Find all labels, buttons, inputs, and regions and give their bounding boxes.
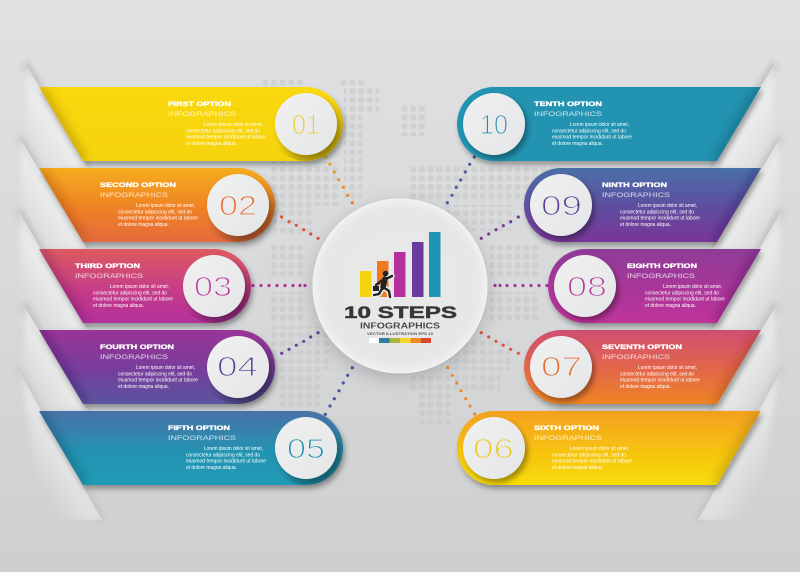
connector: dotted line 06: [446, 366, 476, 416]
background: dotted world map: [261, 78, 560, 424]
text block: Lorem ipsum dolor sit amet,: [638, 203, 697, 209]
text block: consectetur adipiscing elit, sed do: [645, 290, 719, 296]
subheading: INFOGRAPHICS: [534, 435, 603, 442]
text block: [620, 203, 700, 228]
subheading: INFOGRAPHICS: [602, 354, 671, 361]
number badge: [463, 417, 525, 479]
subheading: INFOGRAPHICS: INFOGRAPHICS: [360, 320, 440, 330]
subheading: INFOGRAPHICS: [534, 111, 603, 118]
panel: step 05: [39, 411, 343, 485]
text block: consectetur adipiscing elit, sed do: [620, 209, 694, 215]
text block: et dolore magna aliqua.: [620, 384, 671, 390]
heading: THIRD OPTION: [75, 263, 140, 270]
text block: eiusmod tempor incididunt ut labore: [118, 378, 198, 384]
bar chart icon: [360, 232, 440, 297]
text block: [645, 284, 725, 309]
panel: step 02: [39, 168, 275, 242]
text block: et dolore magna aliqua.: [93, 303, 144, 309]
number badge: 03: [194, 271, 232, 302]
heading: FOURTH OPTION: [100, 344, 174, 351]
connector: dotted line 05: [324, 366, 354, 416]
text block: eiusmod tempor incididunt ut labore: [552, 135, 632, 141]
connector: dotted line 10: [446, 155, 476, 204]
text block: et dolore magna aliqua.: [645, 303, 696, 309]
subheading: INFOGRAPHICS: [168, 435, 237, 442]
text block: consectetur adipiscing elit, sed do: [93, 290, 167, 296]
connector: dotted line 04: [280, 331, 320, 355]
caption: vector illustration: VECTOR ILLUSTRATION EPS 10: [367, 332, 433, 336]
text block: et dolore magna aliqua.: [552, 141, 603, 147]
text block: eiusmod tempor incididunt ut labore: [645, 297, 725, 303]
colour legend strip: [369, 338, 431, 343]
text block: [186, 446, 266, 471]
text block: consectetur adipiscing elit, sed do: [620, 371, 694, 377]
number badge: 07: [541, 351, 582, 382]
connector: dotted line 09: [480, 215, 520, 240]
text block: consectetur adipiscing elit, sed do: [118, 209, 192, 215]
text block: [93, 284, 173, 309]
text block: eiusmod tempor incididunt ut labore: [186, 135, 266, 141]
number badge: [207, 174, 269, 236]
text block: [118, 203, 198, 228]
text block: Lorem ipsum dolor sit amet,: [204, 446, 263, 452]
panel: step 04: [39, 330, 275, 404]
number badge: 01: [292, 109, 320, 140]
connector: dotted line 01: [324, 155, 354, 204]
text block: eiusmod tempor incididunt ut labore: [552, 459, 632, 465]
number badge: [275, 417, 337, 479]
panel: step 07: [524, 330, 761, 404]
number badge: [183, 255, 245, 317]
text block: Lorem ipsum dolor sit amet,: [570, 446, 629, 452]
text block: eiusmod tempor incididunt ut labore: [186, 459, 266, 465]
text block: et dolore magna aliqua.: [118, 222, 169, 228]
text block: eiusmod tempor incididunt ut labore: [620, 216, 700, 222]
heading: SEVENTH OPTION: [602, 344, 682, 351]
text block: consectetur adipiscing elit, sed do: [552, 452, 626, 458]
panel: step 08: [548, 249, 761, 323]
text block: eiusmod tempor incididunt ut labore: [118, 216, 198, 222]
heading: TENTH OPTION: [534, 101, 602, 108]
heading: SIXTH OPTION: [534, 425, 599, 432]
text block: [620, 365, 700, 390]
subheading: INFOGRAPHICS: [100, 354, 169, 361]
number badge: [530, 336, 592, 398]
heading: FIFTH OPTION: [168, 425, 230, 432]
heading: 10 STEPS: 10 STEPS: [344, 303, 457, 322]
number badge: 04: [217, 351, 258, 382]
text block: consectetur adipiscing elit, sed do: [186, 128, 260, 134]
number badge: 05: [287, 433, 325, 464]
number badge: 10: [480, 109, 508, 140]
number badge: [207, 336, 269, 398]
text block: Lorem ipsum dolor sit amet,: [663, 284, 722, 290]
subheading: INFOGRAPHICS: [168, 111, 237, 118]
connector: dotted line 08: [493, 284, 549, 287]
number badge: 06: [473, 433, 514, 464]
heading: FIRST OPTION: [168, 101, 231, 108]
connector: dotted line 07: [480, 331, 520, 355]
text block: [552, 122, 632, 147]
text block: et dolore magna aliqua.: [186, 465, 237, 471]
text block: et dolore magna aliqua.: [552, 465, 603, 471]
text block: et dolore magna aliqua.: [620, 222, 671, 228]
number badge: [463, 93, 525, 155]
text block: consectetur adipiscing elit, sed do: [186, 452, 260, 458]
panel: step 10: [457, 87, 761, 161]
number badge: [554, 255, 616, 317]
text block: [552, 446, 632, 471]
heading: EIGHTH OPTION: [627, 263, 697, 270]
number badge: [275, 93, 337, 155]
text block: Lorem ipsum dolor sit amet,: [570, 122, 629, 128]
text block: [186, 122, 266, 147]
panel: step 03: [39, 249, 251, 323]
text block: eiusmod tempor incididunt ut labore: [620, 378, 700, 384]
subheading: INFOGRAPHICS: [100, 192, 169, 199]
heading: SECOND OPTION: [100, 182, 176, 189]
panel: step 06: [457, 411, 761, 485]
connector: dotted line 03: [251, 284, 307, 287]
text block: Lorem ipsum dolor sit amet,: [136, 203, 195, 209]
text block: Lorem ipsum dolor sit amet,: [638, 365, 697, 371]
text block: Lorem ipsum dolor sit amet,: [136, 365, 195, 371]
text block: consectetur adipiscing elit, sed do: [118, 371, 192, 377]
panel: step 09: [524, 168, 761, 242]
text block: et dolore magna aliqua.: [186, 141, 237, 147]
subheading: INFOGRAPHICS: [602, 192, 671, 199]
text block: et dolore magna aliqua.: [118, 384, 169, 390]
text block: Lorem ipsum dolor sit amet,: [110, 284, 169, 290]
panel: step 01: [39, 87, 343, 161]
text block: eiusmod tempor incididunt ut labore: [93, 297, 173, 303]
center hub: [313, 199, 487, 373]
number badge: [530, 174, 592, 236]
text block: consectetur adipiscing elit, sed do: [552, 128, 626, 134]
connector: dotted line 02: [280, 215, 320, 240]
subheading: INFOGRAPHICS: [627, 273, 696, 280]
text block: Lorem ipsum dolor sit amet,: [204, 122, 263, 128]
icon: running businessman: [373, 271, 392, 297]
number badge: 02: [219, 190, 257, 221]
subheading: INFOGRAPHICS: [75, 273, 144, 280]
number badge: 08: [567, 271, 607, 302]
number badge: 09: [541, 190, 582, 221]
text block: [118, 365, 198, 390]
heading: NINTH OPTION: [602, 182, 667, 189]
